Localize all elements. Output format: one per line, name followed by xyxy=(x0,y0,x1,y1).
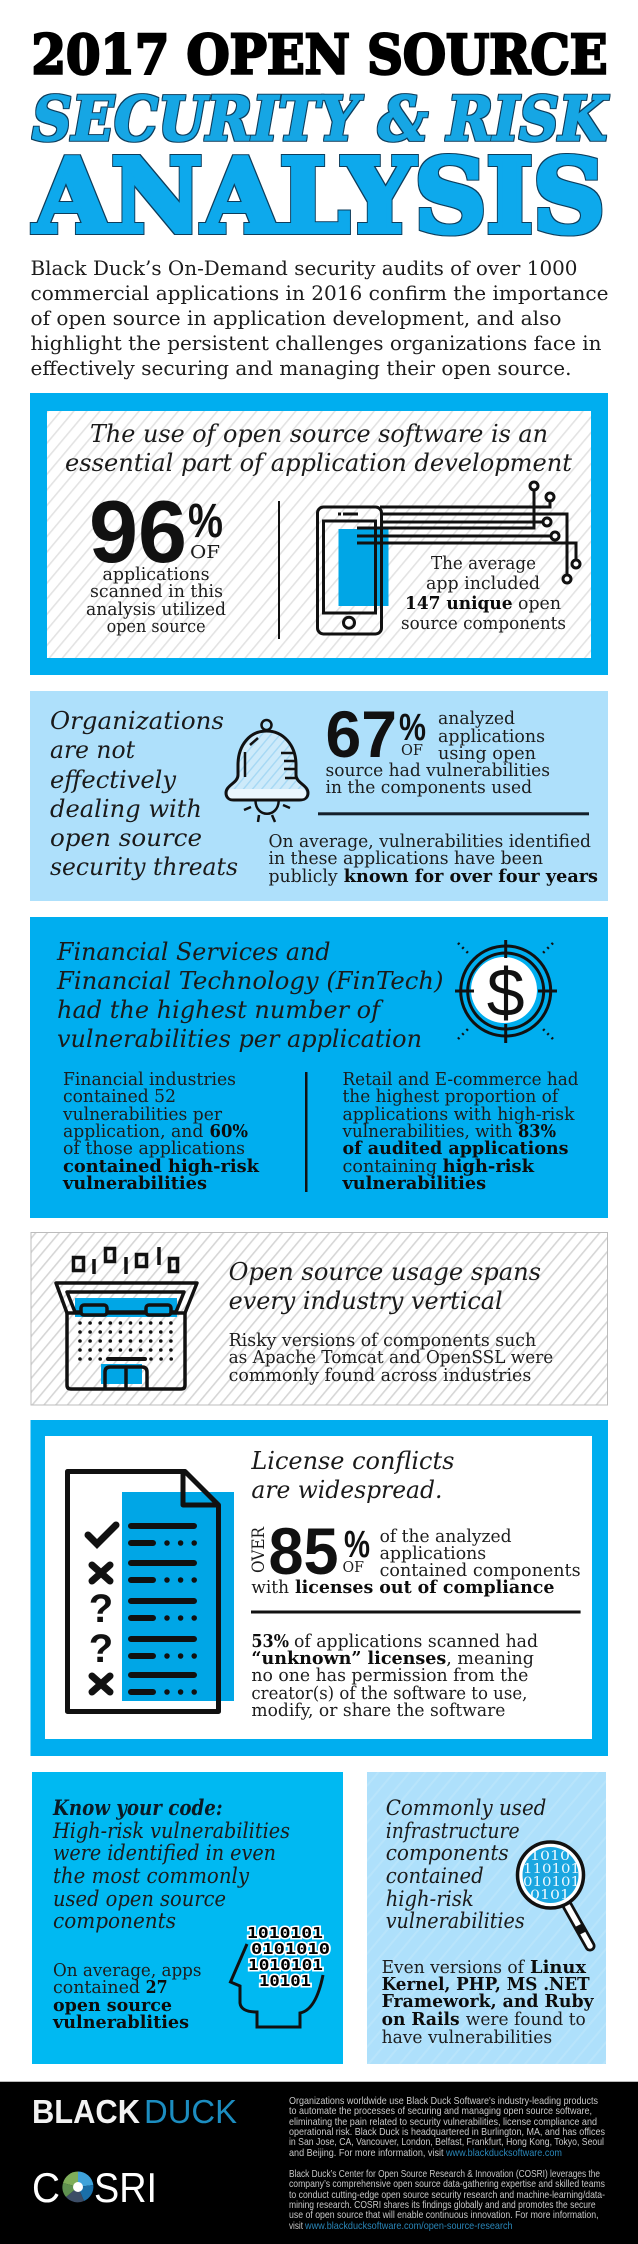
panel: industry vertical xyxy=(31,1232,608,1405)
icon: phone with circuit lines xyxy=(318,482,580,634)
icon: license checklist document: ? xyxy=(89,1587,113,1631)
icon: head with binary: 10101 xyxy=(259,1972,311,1990)
stat: 96 percent: 96 xyxy=(89,482,187,581)
text: retail and e-commerce: high-risk xyxy=(443,1156,535,1177)
text: licenses out of compliance: with xyxy=(251,1577,289,1598)
text: about black duck: and Beijing. For more information, visit xyxy=(289,2147,444,2159)
heading: know your code: High-risk vulnerabilities xyxy=(52,1819,290,1843)
text: retail and e-commerce xyxy=(342,1069,578,1194)
text: about cosri: visit xyxy=(289,2220,303,2232)
text: licenses out of compliance xyxy=(251,1526,581,1598)
text: retail and e-commerce: vulnerabilities xyxy=(342,1173,486,1194)
text: unknown licenses: no one has permission from the xyxy=(251,1665,528,1686)
text: linux kernel etc: on Rails xyxy=(382,2009,460,2030)
logo: cosri xyxy=(32,2164,157,2211)
heading: license conflicts: are widespread. xyxy=(251,1476,442,1504)
stat: over 85 percent: % xyxy=(344,1524,370,1566)
text: applications scanned xyxy=(86,564,226,637)
text: known for over four years xyxy=(268,831,598,887)
text: analyzed applications xyxy=(326,708,550,798)
heading: fintech: vulnerabilities per application xyxy=(57,1025,422,1053)
heading: license conflicts xyxy=(250,1447,454,1504)
text: average app: source components xyxy=(401,613,566,634)
icon: magnifying glass: 0101 xyxy=(530,1888,570,1903)
icon: license checklist document xyxy=(68,1471,234,1712)
heading: organizations not dealing: open source xyxy=(50,824,202,852)
text: average app xyxy=(401,553,566,634)
logo: cosri: SRI xyxy=(94,2164,157,2211)
icon: head with binary xyxy=(230,1924,330,2027)
heading: use of open source xyxy=(65,420,572,477)
title xyxy=(32,22,610,256)
text: applications scanned: open source xyxy=(107,616,206,637)
text: linux kernel etc: Linux xyxy=(530,1957,586,1978)
text: unknown licenses xyxy=(251,1631,538,1721)
heading: organizations not dealing: effectively xyxy=(50,766,176,794)
icon: dollar target: $ xyxy=(487,955,525,1031)
logo: black duck xyxy=(32,2093,237,2130)
text: linux kernel etc: Framework, and Ruby xyxy=(382,1991,594,2012)
heading: infrastructure components: contained xyxy=(386,1864,484,1888)
text: unknown licenses: modify, or share the software xyxy=(251,1700,505,1721)
icon: head with binary: 0101010 xyxy=(251,1940,330,1958)
heading: organizations not dealing: are not xyxy=(50,736,135,764)
text: risky versions: Risky versions of components such xyxy=(229,1330,537,1351)
panel: know your code xyxy=(32,1772,343,2064)
text: 27 vulnerabilities: vulnerablities xyxy=(52,2012,189,2033)
text: known for over four years: in these applications have been xyxy=(268,848,543,869)
heading: infrastructure components xyxy=(386,1796,546,1933)
text: linux kernel etc: have vulnerabilities xyxy=(382,2027,552,2048)
text: analyzed applications: applications xyxy=(438,726,545,747)
title line: analysis: ANALYSIS xyxy=(33,136,605,256)
icon: bell xyxy=(226,720,308,822)
text: 27 vulnerabilities: open source xyxy=(53,1995,172,2016)
text: linux kernel etc: were found to xyxy=(466,2009,586,2030)
text: about cosri xyxy=(289,2168,605,2232)
heading: usage spans: every industry vertical xyxy=(229,1287,503,1315)
text: financial industries: of those applications xyxy=(63,1138,245,1159)
text: retail and e-commerce: 83% xyxy=(518,1121,556,1142)
text: financial industries: vulnerabilities per xyxy=(62,1104,222,1125)
text: retail and e-commerce: containing xyxy=(342,1156,437,1177)
text: average app: app included xyxy=(426,573,540,594)
intro paragraph: Black Duck’s On-Demand security audits of over 1000 xyxy=(30,256,578,280)
panel: infrastructure components xyxy=(367,1772,606,2064)
text: analyzed applications: in the components used xyxy=(326,777,532,798)
text: applications scanned: applications xyxy=(102,564,210,585)
text: unknown licenses: of applications scanned had xyxy=(294,1631,538,1652)
logo: cosri: C xyxy=(32,2164,60,2211)
text: analyzed applications: using open xyxy=(438,743,536,764)
text: known for over four years: publicly xyxy=(268,866,338,887)
text: average app: 147 unique xyxy=(405,593,513,614)
panel: financial services xyxy=(30,917,608,1218)
text: linux kernel etc xyxy=(382,1957,594,2048)
text: 27 vulnerabilities: 27 xyxy=(146,1977,168,1998)
heading: know your code xyxy=(52,1795,290,1933)
text: 27 vulnerabilities: contained xyxy=(53,1977,140,1998)
text: risky versions: commonly found across industries xyxy=(229,1365,531,1386)
icon: head with binary: 1010101 xyxy=(248,1956,323,1974)
heading: license conflicts: License conflicts xyxy=(250,1447,454,1475)
heading: know your code: components xyxy=(53,1909,176,1933)
heading: know your code: were identified in even xyxy=(53,1841,276,1865)
icon: head with binary: 1010101 xyxy=(247,1924,323,1942)
heading: usage spans: Open source usage spans xyxy=(229,1258,541,1286)
panel: open source is essential xyxy=(30,393,608,675)
text: applications scanned: scanned in this xyxy=(90,581,223,602)
text: retail and e-commerce: the highest proportion of xyxy=(342,1086,559,1107)
icon: binary over open laptop xyxy=(56,1247,197,1389)
text: 27 vulnerabilities xyxy=(52,1960,202,2033)
text: 27 vulnerabilities: On average, apps xyxy=(53,1960,202,1981)
text: known for over four years: On average, vulnerabilities identified xyxy=(268,831,591,852)
heading: organizations not dealing: dealing with xyxy=(50,795,202,823)
stat: 67 percent: % xyxy=(399,707,426,749)
text: financial industries: contained 52 xyxy=(63,1086,176,1107)
heading: organizations not dealing: Organizations xyxy=(50,707,224,735)
text: unknown licenses: creator(s) of the software to use, xyxy=(251,1683,527,1704)
heading: know your code: Know your code: xyxy=(52,1795,223,1820)
text: average app: The average xyxy=(431,553,536,574)
panel: license conflicts xyxy=(30,1420,608,1756)
heading: fintech: had the highest number of xyxy=(57,996,384,1024)
stat: over 85 percent: OF xyxy=(342,1558,364,1576)
text: risky versions xyxy=(229,1330,553,1386)
text: financial industries: contained high-risk xyxy=(63,1156,260,1177)
stat: 67 percent: OF xyxy=(401,741,423,759)
text: financial industries: application, and xyxy=(63,1121,203,1142)
heading: fintech: Financial Technology (FinTech) xyxy=(56,967,444,995)
stat: over 85 percent: OVER xyxy=(249,1526,269,1573)
text: average app: open xyxy=(518,593,561,614)
text: about black duck xyxy=(289,2095,605,2159)
heading: infrastructure components: vulnerabilities xyxy=(386,1909,525,1933)
text: licenses out of compliance: applications xyxy=(380,1543,486,1564)
icon: magnifying glass: 1010 xyxy=(530,1849,570,1864)
text: retail and e-commerce: vulnerabilities, with xyxy=(342,1121,513,1142)
text: unknown licenses: “unknown” licenses xyxy=(251,1648,446,1669)
panel: security threats xyxy=(30,691,608,901)
text: about cosri: www.blackducksoftware.com/open-source-research xyxy=(304,2220,513,2232)
heading: organizations not dealing xyxy=(50,707,238,881)
heading: fintech xyxy=(56,938,444,1053)
text: financial industries: vulnerabilities xyxy=(62,1173,207,1194)
stat: over 85 percent: 85 xyxy=(268,1514,338,1588)
heading: know your code: the most commonly xyxy=(53,1864,250,1888)
heading: usage spans xyxy=(229,1258,541,1315)
text: analyzed applications: source had vulnerabilities xyxy=(326,760,550,781)
heading: infrastructure components: Commonly used xyxy=(386,1796,546,1820)
text: financial industries: 60% xyxy=(210,1121,248,1142)
text: licenses out of compliance: of the analyzed xyxy=(380,1526,512,1547)
footer xyxy=(0,2081,638,2244)
text: risky versions: as Apache Tomcat and OpenSSL were xyxy=(229,1347,553,1368)
stat: 96 percent: % xyxy=(188,495,223,548)
text: linux kernel etc: Even versions of xyxy=(382,1957,525,1978)
text: licenses out of compliance: licenses out of compliance xyxy=(295,1577,554,1598)
heading: organizations not dealing: security threats xyxy=(50,853,238,881)
heading: infrastructure components: infrastructure xyxy=(386,1819,520,1843)
intro paragraph: highlight the persistent challenges organizations face in xyxy=(30,331,602,355)
text: retail and e-commerce: applications with high-risk xyxy=(342,1104,576,1125)
text: retail and e-commerce: of audited applications xyxy=(342,1138,568,1159)
stat: 67 percent: 67 xyxy=(326,697,397,771)
heading: know your code: used open source xyxy=(53,1887,226,1911)
heading: use of open source: The use of open source software is an xyxy=(90,420,548,448)
intro paragraph: commercial applications in 2016 confirm the importance xyxy=(30,281,608,305)
heading: use of open source: essential part of application development xyxy=(65,449,572,477)
logo: black duck: DUCK xyxy=(144,2093,237,2130)
text: linux kernel etc: Kernel, PHP, MS .NET xyxy=(382,1974,590,1995)
heading: infrastructure components: components xyxy=(386,1841,509,1865)
text: about black duck: to automate the processes of securing and managing open source software, xyxy=(289,2105,592,2117)
intro paragraph xyxy=(30,256,608,380)
icon: magnifying glass: 110101 xyxy=(523,1862,580,1877)
text: financial industries: Financial industries xyxy=(63,1069,236,1090)
heading: fintech: Financial Services and xyxy=(56,938,330,966)
text: retail and e-commerce: Retail and E-commerce had xyxy=(342,1069,578,1090)
icon: license checklist document: ? xyxy=(89,1627,113,1671)
text: applications scanned: analysis utilized xyxy=(86,599,226,620)
text: about black duck: www.blackducksoftware.com xyxy=(445,2147,562,2159)
text: known for over four years: known for over four years xyxy=(344,866,598,887)
icon: dollar target xyxy=(455,940,557,1043)
text: about black duck: eliminating the pain related to security vulnerabilities, license compliance and xyxy=(289,2116,597,2128)
stat: 96 percent: OF xyxy=(190,542,220,563)
icon: magnifying glass: 010101 xyxy=(523,1875,580,1890)
text: unknown licenses: , meaning xyxy=(446,1648,534,1669)
text: analyzed applications: analyzed xyxy=(438,708,515,729)
intro paragraph: of open source in application development, and also xyxy=(30,306,562,330)
heading: infrastructure components: high-risk xyxy=(386,1887,474,1911)
text: unknown licenses: 53% xyxy=(251,1631,289,1652)
text: financial industries xyxy=(62,1069,260,1194)
stat: over 85 percent xyxy=(249,1514,370,1588)
logo: black duck: BLACK xyxy=(32,2093,140,2130)
text: licenses out of compliance: contained components xyxy=(380,1560,581,1581)
intro paragraph: effectively securing and managing their open source. xyxy=(30,356,572,380)
icon: magnifying glass xyxy=(518,1842,590,1946)
